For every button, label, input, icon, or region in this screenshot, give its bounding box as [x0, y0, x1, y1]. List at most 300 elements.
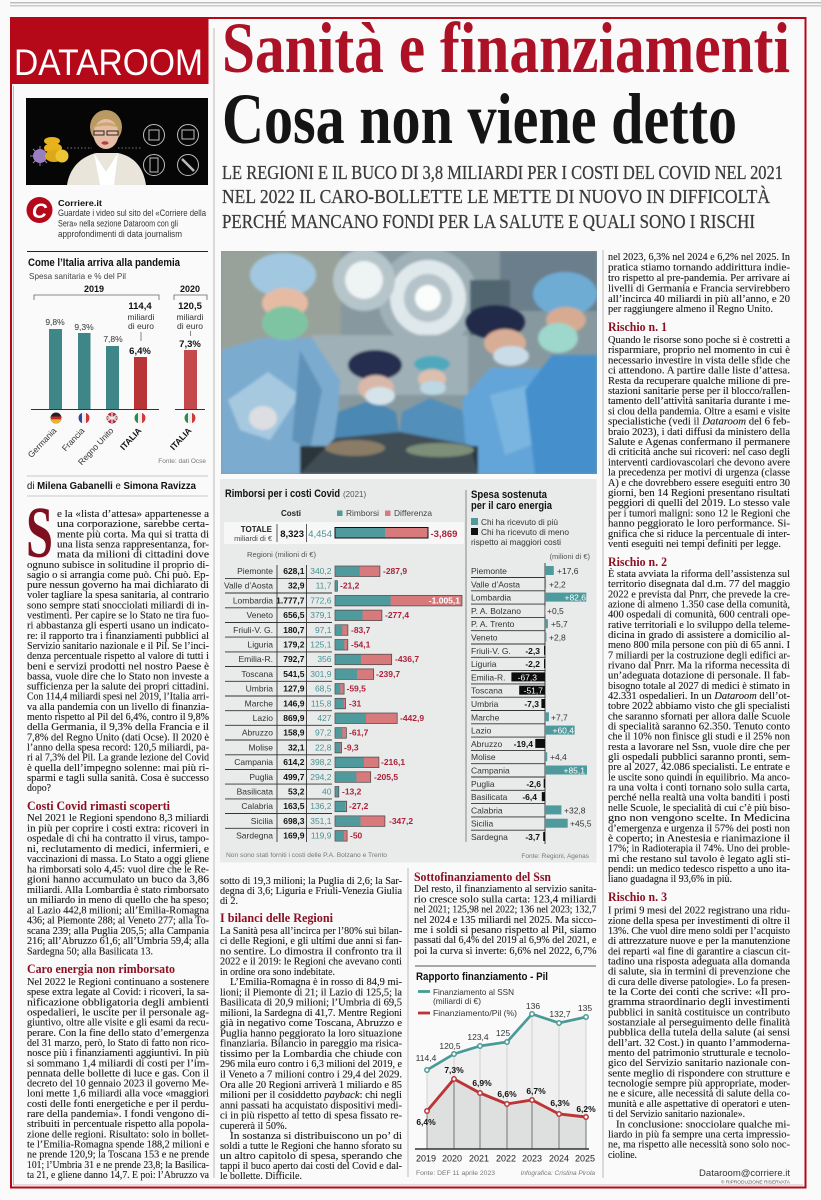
text: i bilanci: 296 mila euro contro i 6,3 milioni del 2019, e [220, 1059, 402, 1070]
text: rischio 1: Resta da recuperare qualche milione di pre- [608, 376, 790, 387]
energia region names: Veneto [471, 632, 498, 642]
text: rischio 1: di criticità anche sui ricoveri: nel caso degli [608, 447, 790, 458]
energia region names: Lazio [471, 726, 492, 736]
text column 4: continuation: per raggiungere almeno il Regno Unito. [608, 304, 773, 315]
difference labels: -287,9 [383, 566, 407, 576]
text: caro energia: ospedalieri, le uscite per il personale ag- [27, 1008, 210, 1018]
energia negative values: -2,6 [526, 779, 541, 789]
heading: rischio 1: Rischio n. 1 [608, 319, 667, 334]
text: rischio 2: di specialità saranno 62.350. Tenuto conto [608, 722, 790, 733]
text: costi covid: 436; al Piemonte 288; al Veneto 277; alla To- [27, 916, 209, 927]
contact and copyright [699, 1168, 791, 1186]
costs column: 169,9 [283, 831, 305, 841]
rimborsi column: 301,9 [310, 669, 332, 679]
flags [50, 412, 196, 424]
text: caro energia: giuntivo, oltre alle visite e gli esami da recu- [27, 1018, 209, 1029]
presenter [67, 110, 146, 185]
contact and copyright: © RIPRODUZIONE RISERVATA [721, 1178, 791, 1186]
totale row: -3,869 [430, 529, 457, 540]
text: rischio 2: gli ospedali pubblici saranno pronti, sem- [608, 752, 791, 763]
energia region names: P. A. Trento [471, 619, 515, 629]
panel: rimborsi e caro energia [220, 479, 596, 862]
text: rischio 2: le uscite sono quindi in equilibrio. Ma anco- [608, 772, 790, 783]
text column 1: intro: è quella dell’impegno solenne: mai più ri- [27, 763, 210, 774]
difference labels: -13,2 [342, 786, 362, 796]
text column 1: intro: sufficienza per la salute dei propri cittadini. [27, 682, 209, 693]
text: i bilanci [220, 926, 403, 1182]
heading: i bilanci: I bilanci delle Regioni [220, 910, 333, 925]
region names: Sicilia [251, 816, 273, 826]
text: rischio 3: mento del patrimonio strutturale e tecnolo- [608, 1048, 791, 1059]
text: rischio 1: ci attendono. A partire dalle liste d’attesa. [608, 366, 790, 377]
text: rischio 1: gnifica che si riduce la percentuale di inter- [608, 529, 790, 540]
text: caro energia [27, 977, 210, 1181]
caro energia legend: Chi ha ricevuto di più [481, 517, 558, 527]
text: rischio 3: In conclusione: snocciolare qualche mi- [616, 1120, 791, 1130]
text: rischio 2: pendi: un medico tedesco rispetto a uno ita- [608, 864, 790, 875]
caro energia legend: Chi ha ricevuto di meno [481, 527, 569, 537]
text: rischio 3: gramma straordinario degli investimenti [608, 997, 790, 1008]
energia negative bars [511, 646, 545, 841]
text: caro energia: zione delle regioni. Risultato: solo in bollet- [27, 1129, 209, 1140]
dataroom logo: DATAROOM [14, 42, 203, 83]
country labels: Francia [60, 425, 87, 453]
text column 1: intro: e la «lista d’attesa» appartenesse a [57, 509, 209, 520]
text column 1: intro: mente più corta. Ma qui si tratta di [57, 529, 209, 540]
text: rischio 3: zione della spesa per investimenti di oltre il [608, 916, 790, 927]
region names: Basilicata [237, 786, 273, 796]
teal values: 120,5 [439, 1041, 461, 1051]
percent values: 6,2% [576, 1104, 596, 1114]
energia region names: Calabria [471, 805, 503, 815]
text: i bilanci: Puglia hanno peggiorato la loro situazione [220, 1028, 402, 1039]
text: sottofinanziamento: nel 2021; 125,98 nel 2022; 136 nel 2023; 132,7 [414, 904, 596, 916]
text: caro energia: del 31 marzo, però, lo Stato di fatto non rico- [27, 1038, 209, 1049]
text: rischio 1: interventi cardiovascolari che devono avere [608, 457, 790, 468]
text: i bilanci: il Veneto a 7 milioni contro i 29,4 del 2029. [220, 1070, 402, 1080]
caro energia heading [471, 489, 553, 512]
difference labels: -27,2 [349, 801, 369, 811]
energia region names: P. A. Bolzano [471, 606, 521, 616]
text: caro energia: nosce più i finanziamenti aggiuntivi. In più [27, 1048, 210, 1059]
bar chart: 120,5 [178, 301, 203, 312]
energia region names: Piemonte [471, 566, 507, 576]
energia negative values: -2,3 [525, 646, 540, 656]
column rules [214, 28, 603, 1178]
text: sottofinanziamento: me i soldi si pesano rispetto al Pil, siamo [414, 925, 597, 936]
rimborsi column: 356 [317, 654, 332, 664]
rimborsi column: 125,1 [310, 640, 332, 650]
year brackets [34, 284, 207, 300]
text: i bilanci: anni passati ha acquistato dispositivi medi- [220, 1100, 403, 1111]
energia region names: Toscana [471, 686, 503, 696]
percent values: 6,6% [497, 1089, 517, 1099]
text: rischio 3: tecnologie sempre più appropriate, moder- [608, 1078, 791, 1090]
year axis labels: 2021 [469, 1154, 489, 1164]
totale row: 8,323 [280, 529, 304, 540]
text: i bilanci: ci in più rispetto al tetto di spesa fissato re- [220, 1111, 403, 1122]
text: i bilanci: milioni per il cosiddetto payback: chi negli [220, 1090, 402, 1101]
country labels: ITALIA [168, 426, 193, 452]
region names: Campania [234, 757, 273, 767]
text: rischio 2: territorio disegnata dal d.m. 77 del maggio [608, 579, 790, 590]
bar chart: 7,3% [179, 339, 201, 350]
text: i bilanci: ci delle Regioni, e gli ultimi due anni si fan- [220, 936, 402, 947]
text column 1: intro: mata da milioni di cittadini dove [57, 550, 209, 561]
text: sottofinanziamento: passati dal 6,4% del 2019 al 6,9% del 2021, e [414, 935, 597, 946]
text: costi covid: Nel 2021 le Regioni spendono 8,3 miliardi [27, 813, 209, 824]
costs column: 179,2 [283, 640, 305, 650]
text: rischio 2: nelle Scuole, le specialità di cui c’è più biso- [608, 803, 790, 814]
rimborsi legend: Rimborsi [346, 508, 379, 518]
text: rischio 2: un’adeguata dotazione di personale. Il fab- [608, 671, 791, 682]
text: rischio 3: dell’art. 32 Cost.) in quanto l’ammoderna- [608, 1038, 791, 1049]
source: Fonte: Regioni, Agenas [521, 853, 590, 860]
energia negative values: -19,4 [514, 739, 533, 749]
text column 4: continuation: tro rispetto al pre-pandemia. Per arrivare ai [608, 273, 790, 284]
energia positive values: +2,2 [549, 579, 566, 589]
text: rischio 1: giorni, ben 14 Regioni presentano risultati [608, 488, 790, 499]
year brackets: 2019 [84, 284, 104, 294]
costs column: 163,5 [283, 801, 305, 811]
energia region names: Emilia-R. [471, 672, 505, 682]
text: sottofinanziamento: nel 2024 e 135 miliardi nel 2025. Ma sicco- [414, 915, 597, 926]
text: i bilanci: no sentire. Lo dimostra il confronto tra il [220, 946, 402, 957]
teal values: 135 [578, 1003, 592, 1013]
text: rischio 3: sostanziale al perseguimento delle finalità [608, 1018, 790, 1028]
difference labels: -31 [349, 698, 362, 708]
text column 4: continuation [608, 252, 791, 315]
text column 1: intro: sparmi e tagli sulla sanità. Cosa è successo [27, 773, 209, 784]
text: i bilanci: in ordine ora sono indebitate. [220, 967, 335, 978]
text: rischio 2: d’emergenza e urgenza il 57% dei posti non [608, 823, 791, 834]
text: rischio 1: Quando le risorse sono poche si è costretti a [608, 335, 790, 346]
country labels [26, 425, 193, 467]
text: sottofinanziamento [414, 884, 597, 957]
text column 1: intro: dopo? [27, 783, 51, 794]
text: caro energia: ta 21, e gliene danno 14,7. E poi: l’Abruzzo va [27, 1170, 209, 1181]
corriere promo: approfondimenti di data journalism [58, 229, 182, 239]
costs column: 146,9 [283, 698, 305, 708]
rimborsi column: 115,8 [311, 698, 332, 708]
panel: come l'Italia arriva alla pandemia [26, 252, 208, 467]
caro energia heading: per il caro energia [471, 500, 553, 512]
rimborsi column: 340,2 [310, 566, 332, 576]
text: costi covid: al Lazio 442,8 milioni; all’Emilia-Romagna [27, 905, 209, 916]
energia positive values: +45,5 [570, 819, 592, 829]
text column 1: intro: va alla pandemia con un livello di finanzia- [27, 702, 209, 713]
text: costi covid: in più per coprire i costi extra: ricoveri in [27, 823, 210, 834]
rimborsi column: 398,2 [310, 757, 332, 767]
region names: Toscana [241, 669, 273, 679]
difference labels: -61,7 [349, 728, 369, 738]
red line [425, 1077, 588, 1119]
region names: Molise [248, 742, 273, 752]
top rule [10, 2, 821, 6]
rimborsi column: 379,1 [310, 610, 332, 620]
bar chart: di euro [128, 321, 154, 331]
text column 1: intro: vestimenti. Per capire se lo Stato ne tira fuo- [27, 610, 209, 622]
costs column: 869,9 [283, 713, 305, 723]
photo: surgeons in operating room [221, 248, 597, 474]
chart heading: Spesa sanitaria e % del Pil [29, 271, 126, 281]
text: rischio 2: 400 ospedali di comunità, 600 centrali ope- [608, 610, 790, 621]
text column 2: continuation [220, 876, 402, 907]
caro energia heading: Spesa sostenuta [471, 489, 548, 501]
line chart: rapporto finanziamento - pil [415, 966, 596, 1177]
text: caro energia: ne prende 120,9; la Toscana 153 e ne prende [27, 1150, 209, 1161]
rimborsi column: 97,2 [315, 728, 332, 738]
text column 1: intro: denza percentuale rispetto al valore di tutti i [27, 651, 209, 662]
video thumbnail [26, 98, 208, 185]
heading: sottofinanziamento: Sottofinanziamento del Ssn [414, 869, 552, 884]
grid stems [427, 1014, 586, 1117]
region names: Piemonte [237, 566, 273, 576]
text: rischio 2: pre al 2027, 42.086 specialisti. Le entrate e [608, 762, 790, 773]
text column 1: intro: voler tagliare la spesa sanitaria, al contrario [27, 590, 209, 601]
text column 2: continuation: di 2. [220, 896, 238, 907]
costs column: 792,7 [283, 654, 305, 664]
text: rischio 3 [608, 906, 791, 1161]
costs column: 127,9 [283, 684, 305, 694]
text: rischio 3: 13%. Che vuol dire meno soldi per l’acquisto [608, 926, 790, 937]
difference labels: -83,7 [351, 625, 371, 635]
chart legend: (miliardi di €) [433, 996, 481, 1006]
text column 1: intro [27, 509, 210, 794]
year axis labels: 2019 [416, 1154, 436, 1164]
text: rischio 3: dei reparti «al fine di garantire a ciascun cit- [608, 946, 790, 957]
difference labels: -50 [350, 831, 363, 841]
year brackets: 2020 [180, 284, 200, 294]
corriere promo: Corriere.it [58, 198, 102, 208]
text: costi covid: scana 239; alla Puglia 205,5; alla Campania [27, 926, 209, 937]
corriere promo: Sera» nella sezione Dataroom con gli [58, 218, 178, 228]
teal values: 125 [496, 1028, 510, 1038]
bar chart: 9,8% [45, 317, 65, 327]
chart heading: Rapporto finanziamento - Pil [416, 971, 548, 983]
chart heading: Come l’Italia arriva alla pandemia [28, 257, 181, 269]
text: rischio 1: per i tumori maligni: sono 12 le Regioni che [608, 508, 790, 519]
caro energia legend: rispetto ai maggiori costi [471, 537, 561, 547]
energia positive values: +4,4 [550, 752, 567, 762]
text: rischio 3: sente meglio di rispondere con strutture e [608, 1068, 790, 1079]
stacked bars: rimborsi [335, 566, 391, 841]
text: costi covid: gioni hanno accumulato un buco da 3,86 [27, 875, 209, 886]
bar chart: di euro [177, 321, 203, 331]
text column 1: intro: bassa, vuole dire che lo Stato non investe a [27, 671, 209, 682]
energia positive values: +85,1 [563, 766, 585, 776]
energia region names: Marche [471, 712, 500, 722]
text column 1: intro: Servizio sanitario nazionale e il Pil. Se l’inci- [27, 641, 209, 652]
energia positive values: +7,7 [551, 712, 568, 722]
text column 1: intro: re: il rapporto tra i finanziamenti pubblici al [27, 631, 209, 642]
text: rischio 3: ti del Servizio sanitario nazionale». [608, 1109, 745, 1120]
difference labels: -216,1 [381, 757, 405, 767]
region names: Puglia [249, 772, 273, 782]
text: rischio 3: ne e sicure, alle necessità di salute della co- [608, 1089, 790, 1100]
text: costi covid: Sardegna 50; alla Basilicata 13. [27, 946, 153, 958]
text: caro energia: decreto del 10 gennaio 2023 il governo Me- [27, 1079, 209, 1090]
teal values: 136 [526, 1001, 540, 1011]
text: rischio 3: pubblici in sanità costituisce un contributo [608, 1007, 790, 1018]
text: i bilanci: L’Emilia-Romagna è in rosso di 84,9 mi- [230, 977, 402, 988]
text: rischio 1: risparmiare, proprio nel momento in cui è [608, 345, 790, 356]
text column 1: intro: ognuno subisce in solitudine il proprio di- [27, 560, 210, 571]
text: rischio 1: stazioni sanitarie perse per il blocco/rallen- [608, 386, 790, 397]
rimborsi column: 294,2 [310, 772, 332, 782]
text: rischio 3: gico del Servizio sanitario nazionale con- [608, 1058, 791, 1069]
text: rischio 2: 17%; in Radioterapia il 74%. Uno dei proble- [608, 844, 790, 855]
energia negative values: -51,7 [524, 686, 543, 696]
percent values: 6,9% [472, 1078, 492, 1088]
text column 4: continuation: livelli di Germania e Francia servirebbero [608, 284, 790, 294]
text: i bilanci: finanziaria. Bilancio in pareggio ma risica- [220, 1039, 402, 1050]
icons [144, 124, 198, 176]
text: rischio 2: bisogno totale al 2027 di medici è stimato in [608, 681, 791, 692]
energia region names: Campania [471, 766, 510, 776]
chart legend [418, 987, 517, 1018]
text: rischio 2: resta a lavorare nel Ssn, vuole dire che per [608, 742, 791, 753]
bar chart: 114,4 [128, 301, 152, 312]
text: rischio 1: Salute e Agenas confermano il permanere [608, 437, 790, 448]
corriere promo: C [32, 200, 48, 223]
text column 1: intro: della Germania, il 9,3% della Francia e il [27, 722, 209, 733]
heading: caro energia: Caro energia non rimborsato [27, 961, 175, 976]
costs column: 628,1 [283, 566, 305, 576]
energia positive values: +5,7 [551, 619, 568, 629]
text column 4: continuation: nel 2023, 6,3% nel 2024 e 6,2% nel 2025. In [608, 252, 791, 263]
text: i bilanci: un altro capitolo di spesa, sperando che [220, 1151, 402, 1162]
costs column: 656,5 [283, 610, 305, 620]
energia positive values: +2,8 [549, 632, 566, 642]
energia region names: Umbria [471, 699, 499, 709]
heading: rischio 2: Rischio n. 2 [608, 554, 667, 569]
text: costi covid: ha rimborsati solo 4,45: vuol dire che le Re- [27, 864, 209, 875]
energia negative values: -7,3 [524, 699, 539, 709]
icon: virus and coins [30, 137, 142, 166]
text: rischio 3: di attrezzature nuove e per la manutenzione [608, 936, 790, 947]
text: i bilanci: lioni; il Piemonte di 21; il Lazio di 125,5; la [220, 987, 402, 998]
energia positive values: +0,5 [547, 606, 564, 616]
text: i bilanci: Basilicata di 20,9 milioni; l’Umbria di 69,5 [220, 998, 402, 1009]
text: costi covid: ospedale di chi ha contratto il virus, tampo- [27, 834, 209, 844]
byline [27, 476, 208, 496]
text: rischio 2: mi che restano sul tavolo è legato agli sti- [608, 854, 791, 865]
energia region names: Abruzzo [471, 739, 502, 749]
text: rischio 2: rative territoriali e lo sviluppo della teleme- [608, 620, 790, 631]
costs column: 158,9 [283, 728, 305, 738]
text: rischio 3: munità e alle aspettative di operatori e uten- [608, 1099, 790, 1110]
energia positive values: +82,6 [564, 593, 586, 603]
bar chart [31, 301, 205, 410]
energia negative values: -2,2 [525, 659, 540, 669]
rimborsi column: 136,2 [310, 801, 332, 811]
country labels: Regno Unito [76, 425, 116, 467]
text: rischio 1: hanno peggiorato le loro performance. Si- [608, 519, 791, 530]
text: i bilanci: tappi il buco aperto dai costi del Covid e dal- [220, 1161, 402, 1172]
footnote: Non sono stati forniti i costi delle P.A. Bolzano e Trento [226, 852, 387, 859]
costs column: 180,7 [283, 625, 305, 635]
region names: Liguria [247, 640, 273, 650]
text column 1: intro: beni e servizi prodotti nel nostro Paese è [27, 661, 209, 672]
text: caro energia: stribuiti in percentuale rispetto alla popola- [27, 1119, 209, 1130]
text column 2: continuation: degna di 3,6; Liguria e Friuli-Venezia Giulia [220, 886, 402, 897]
text: rischio 2: 42.331 ospedalieri. In un Dataroom dell’ot- [608, 691, 790, 702]
text column 4: continuation: all’incirca 40 miliardi in più all’anno, e 20 [608, 294, 790, 305]
bar chart: miliardi [128, 312, 155, 322]
percent values: 6,4% [416, 1117, 436, 1127]
divider [465, 490, 467, 842]
rimborsi column: 97,1 [315, 625, 332, 635]
text: i bilanci: In sostanza si distribuiscono un po’ di [230, 1131, 402, 1142]
credits [416, 1170, 595, 1177]
energia negative values: -6,4 [522, 792, 537, 802]
region names: Abruzzo [242, 728, 273, 738]
text: rischio 2 [608, 568, 791, 885]
drop cap: S [26, 492, 53, 573]
stacked bars: differenza [335, 566, 462, 841]
dataroom logo [10, 17, 208, 84]
text: sottofinanziamento: rio cresce solo sulla carta: 123,4 miliardi [414, 894, 597, 905]
rimborsi column: 119,9 [311, 831, 332, 841]
chart legend: Finanziamento/Pil (%) [433, 1008, 517, 1018]
text: rischio 3: liardo in più fa sempre una certa impressio- [608, 1130, 791, 1140]
energia region names: Liguria [471, 659, 497, 669]
text: caro energia: pennata delle bollette di luce e gas. Con il [27, 1068, 209, 1079]
year axis labels: 2022 [496, 1154, 516, 1164]
rimborsi column: 22,8 [315, 742, 332, 752]
text column 1: intro: ri al 7,3% del Pil. La grande lezione del Covid [27, 753, 210, 764]
energia rules [471, 563, 545, 844]
table caption: Regioni (milioni di €) [247, 550, 317, 559]
source: Fonte: dati Ocse [158, 458, 206, 465]
percent values [416, 1065, 596, 1127]
text: caro energia: perare. Con la fine dello stato d’emergenza [27, 1028, 209, 1039]
text: i bilanci: 2022 e il 2019: le Regioni che avevano conti [220, 957, 402, 968]
costs column: 614,2 [283, 757, 305, 767]
text: rischio 2: perché nella realtà una volta banditi i posti [608, 793, 790, 804]
title [222, 8, 790, 159]
rimborsi legend [281, 508, 432, 518]
text column 4: continuation: pratica stiamo tornando addirittura indie- [608, 262, 791, 274]
costs column: 541,5 [283, 669, 305, 679]
text: rischio 1: venti eseguiti nei tempi definiti per legge. [608, 539, 781, 550]
costs column [276, 566, 305, 841]
credits: Fonte: DEF 11 aprile 2023 [416, 1170, 495, 1177]
text: i bilanci: La Sanità pesa all’incirca per l’80% sui bilan- [220, 926, 402, 937]
region names: Marche [245, 698, 273, 708]
rimborsi column: 772,6 [310, 595, 332, 605]
rimborsi column: 11,7 [316, 581, 332, 591]
text: costi covid: un miliardo in meno di quello che ha speso; [27, 895, 209, 906]
text: caro energia: 101; l’Umbria 31 e ne prende 23,8; la Basilica- [27, 1160, 209, 1171]
text: i bilanci: Ora alle 20 Regioni arriverà 1 miliardo e 85 [220, 1080, 402, 1091]
text: rischio 2: ra una volta i conti tornano solo sulla carta, [608, 783, 790, 794]
corriere promo: Guardate i video sul sito del «Corriere della [58, 208, 206, 218]
text: rischio 3: di cura delle diverse patologie». Lo fa presen- [608, 977, 790, 988]
text: rischio 3: I primi 9 mesi del 2022 registrano una ridu- [608, 906, 790, 917]
rimborsi heading: (2021) [343, 490, 366, 499]
text: rischio 2: è coperto; in Anestesia e rianimazione il [608, 833, 790, 844]
difference labels: -277,4 [385, 610, 409, 620]
totale row: 4,454 [308, 529, 332, 540]
teal values [416, 1001, 592, 1063]
text: caro energia: spese extra legate al Covid: i ricoveri, la sa- [27, 987, 209, 998]
year axis labels: 2020 [442, 1154, 462, 1164]
costs column: 32,1 [288, 742, 305, 752]
text: caro energia: loni mette 1,6 miliardi alla voce «maggiori [27, 1089, 209, 1100]
text: i bilanci: soldi a tutte le Regioni che hanno sforato su [220, 1141, 403, 1152]
